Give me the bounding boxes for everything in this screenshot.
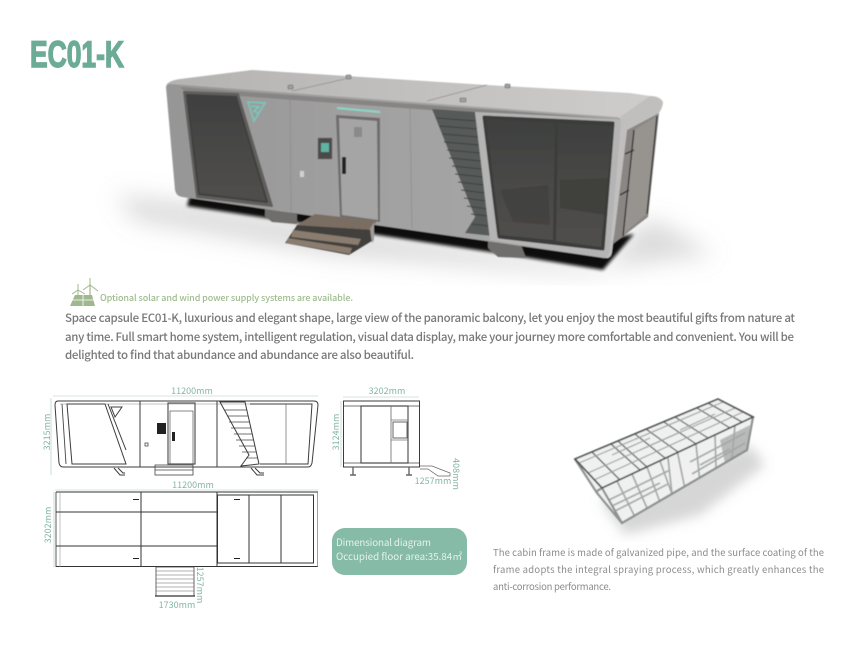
frame description: anti-corrosion performance. — [493, 579, 611, 593]
side elevation width label: 11200mm — [171, 384, 213, 397]
frame description — [493, 545, 824, 593]
floor area callout: Occupied floor area:35.84㎡ — [336, 549, 462, 563]
capsule render — [115, 70, 715, 275]
roof — [167, 70, 652, 118]
description paragraph: delighted to find that abundance and abundance are also beautiful. — [65, 347, 414, 363]
plan height label: 3202mm — [41, 507, 54, 543]
end wall — [613, 113, 659, 244]
door — [336, 115, 380, 222]
support feet — [265, 208, 526, 258]
left window — [184, 92, 272, 206]
end wall band — [605, 96, 663, 258]
roof lifting lugs — [288, 75, 510, 102]
intercom panel — [318, 138, 332, 159]
ground shadow — [115, 195, 715, 275]
floor area callout: Dimensional diagram — [336, 535, 431, 549]
frame description: The cabin frame is made of galvanized pipe, and the surface coating of the — [493, 545, 824, 559]
frame description: frame adopts the integral spraying process, which greatly enhances the — [493, 562, 824, 576]
end elevation drawing — [329, 384, 463, 490]
end elevation height label: 3124mm — [329, 414, 342, 450]
stair width label: 1730mm — [159, 598, 195, 611]
door light — [337, 107, 380, 113]
panel seams — [290, 98, 412, 228]
top lip — [180, 87, 620, 124]
floor area callout — [332, 528, 467, 575]
side elevation drawing — [40, 384, 318, 475]
plan width label: 11200mm — [172, 478, 214, 491]
floor plan drawing — [41, 478, 318, 611]
side elevation height label: 3215mm — [40, 414, 53, 450]
logo — [248, 102, 265, 121]
stair depth label: 1257mm — [415, 474, 451, 487]
description paragraph: any time. Full smart home system, intelligent regulation, visual data display, make your journey more comfortable and convenient. You will be — [65, 329, 794, 345]
entry steps — [285, 214, 377, 255]
panoramic window — [484, 117, 613, 249]
roof seams — [292, 79, 487, 101]
front window frame — [475, 112, 622, 258]
end elevation width label: 3202mm — [369, 384, 405, 397]
description paragraph — [65, 310, 795, 363]
wind and solar icon — [70, 278, 98, 306]
stair length label: 1257mm — [194, 567, 207, 603]
switch — [300, 171, 304, 177]
galvanized frame render — [575, 399, 765, 535]
description paragraph: Space capsule EC01-K, luxurious and elegant shape, large view of the panoramic balcony, let you enjoy the most beautiful gifts from nature at — [65, 310, 795, 326]
front wall — [166, 84, 623, 258]
solar and wind note: Optional solar and wind power supply systems are available. — [100, 291, 353, 304]
louver vent — [432, 109, 492, 236]
stair height label: 408mm — [450, 458, 463, 490]
title: EC01-K — [30, 34, 124, 75]
